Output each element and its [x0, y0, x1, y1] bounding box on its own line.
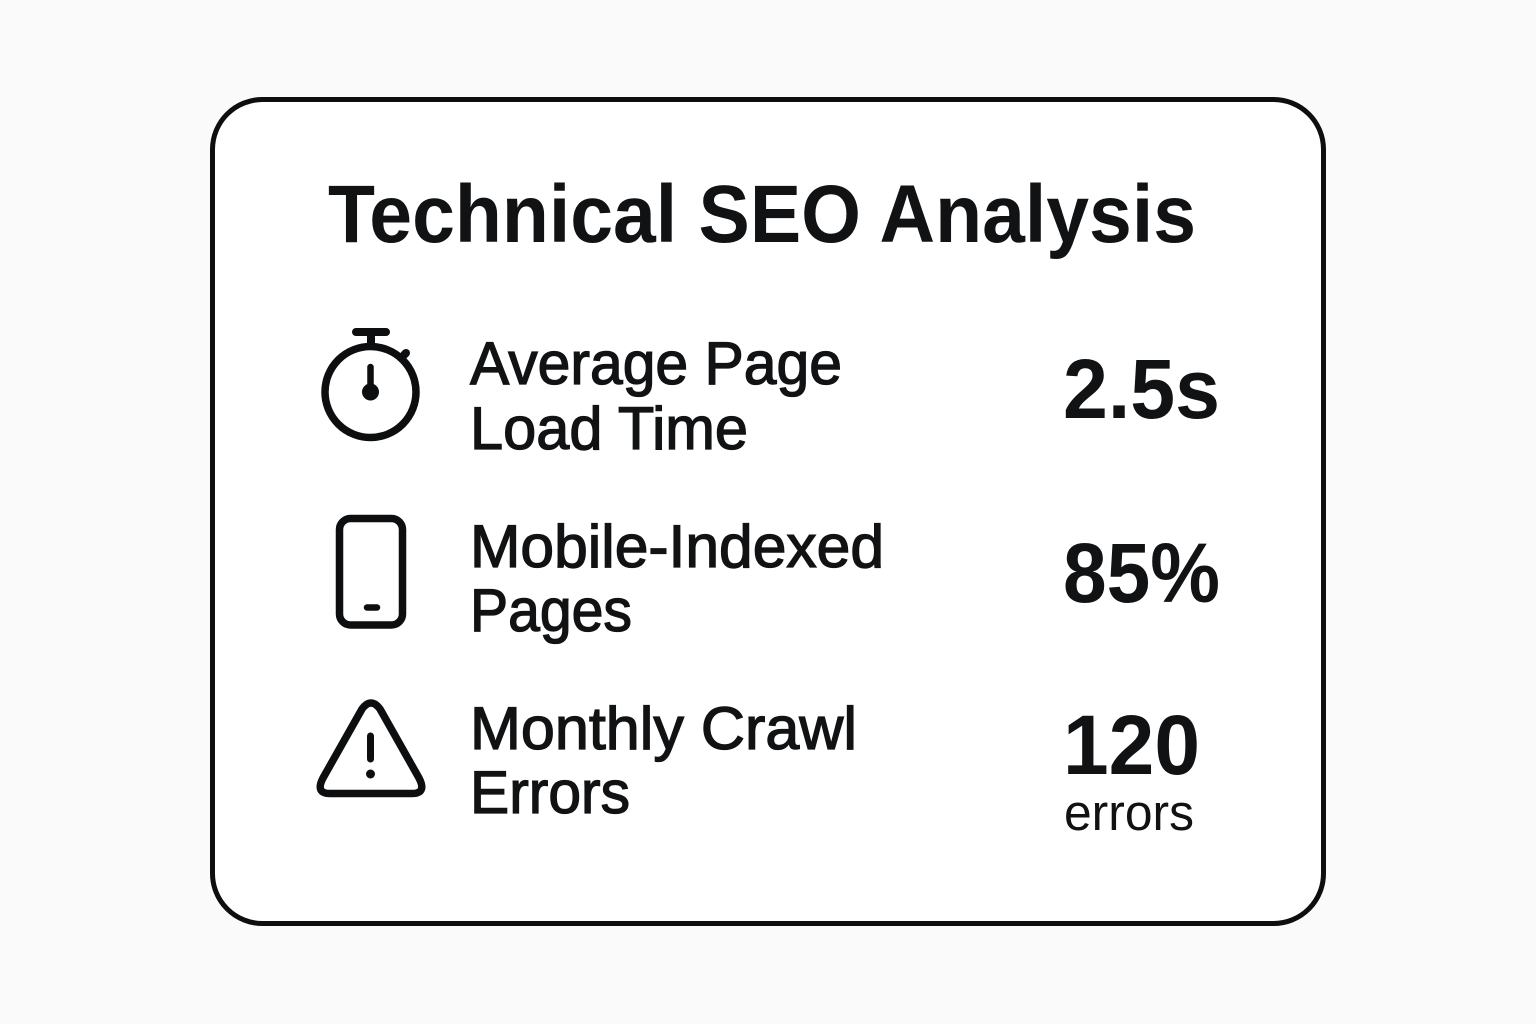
label: average page load time: Average Page: [470, 330, 842, 397]
label: average page load time: [470, 330, 842, 462]
title: Technical SEO Analysis: [328, 169, 1196, 260]
label: mobile-indexed pages: Mobile-Indexed: [470, 513, 884, 580]
value: 2.5s: 2.5s: [1063, 342, 1220, 436]
label: monthly crawl errors: Monthly Crawl: [470, 695, 857, 762]
label: monthly crawl errors: [470, 695, 857, 826]
value: 120 errors: 120: [1063, 698, 1200, 792]
panel: card: [212, 100, 1324, 924]
label: monthly crawl errors: Errors: [470, 759, 630, 826]
label: mobile-indexed pages: Pages: [470, 577, 632, 644]
row: mobile-indexed pages: [340, 513, 1220, 644]
row: monthly crawl errors: [320, 695, 1200, 841]
value: 120 errors: errors: [1064, 784, 1194, 841]
value: 85%: 85%: [1063, 526, 1220, 620]
label: average page load time: Load Time: [470, 395, 748, 462]
icon: smartphone: [340, 518, 402, 625]
value: 120 errors: [1063, 698, 1200, 841]
icon: stopwatch: [325, 332, 416, 438]
label: mobile-indexed pages: [470, 513, 884, 644]
row: page load time: [325, 330, 1220, 462]
icon: warning triangle: [320, 703, 422, 794]
